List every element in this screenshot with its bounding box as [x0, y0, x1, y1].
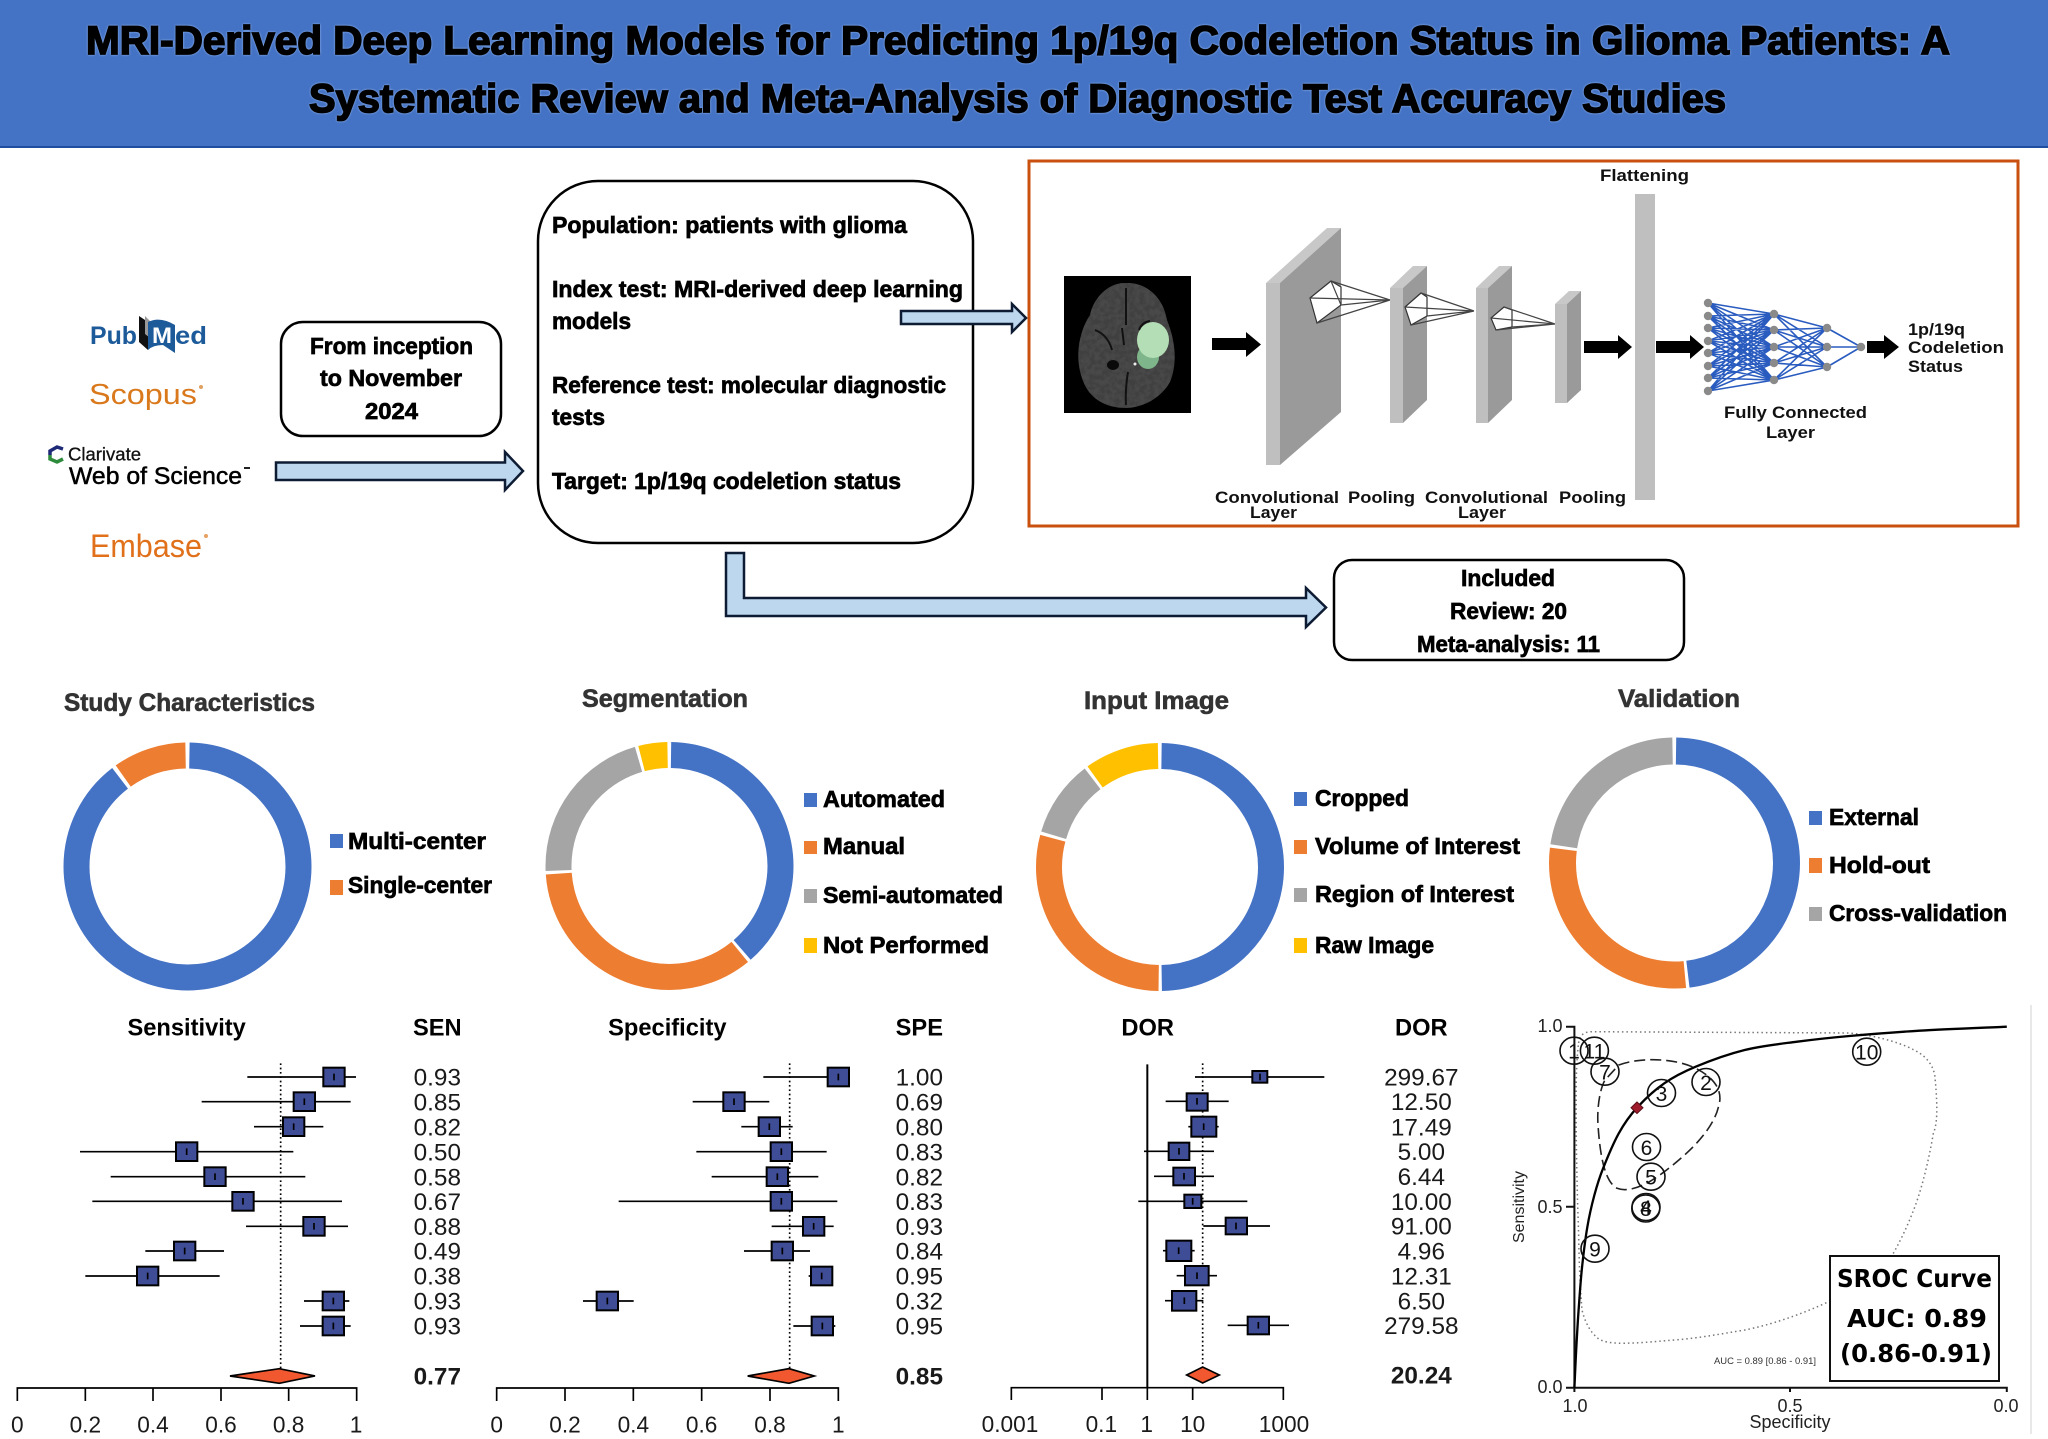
axis: 10: [1180, 1411, 1205, 1437]
axis: 0.6: [686, 1412, 717, 1438]
legend: Cropped: [1315, 785, 1409, 811]
confidence region: [1598, 1060, 1720, 1190]
panel: segmentation donut: [558, 685, 1003, 977]
output label: Codeletion: [1908, 338, 2004, 357]
forest plot: DOR: [982, 1015, 1459, 1437]
pooled diamond: [230, 1369, 315, 1383]
PICO criteria box: models: [552, 308, 631, 334]
study values: 12.50: [1391, 1089, 1452, 1116]
legend: Cross-validation: [1829, 900, 2007, 926]
output label: 1p/19q: [1908, 320, 1965, 339]
title banner: [0, 0, 2048, 148]
legend: Raw Image: [1315, 932, 1434, 958]
heading: Study Characteristics: [64, 689, 315, 717]
SROC callout box: [1830, 1256, 1999, 1381]
study markers: 2: [1700, 1072, 1712, 1095]
study boxes: [597, 1068, 849, 1335]
axis labels: 0.5: [1537, 1197, 1563, 1217]
axis: [982, 1388, 1309, 1437]
PICO criteria box: Population: patients with glioma: [552, 212, 907, 238]
forest plot: sensitivity: [11, 1015, 462, 1438]
layer labels: [1215, 488, 1626, 522]
flattening bar: [1635, 194, 1655, 500]
legend: [330, 828, 492, 898]
database logos: [50, 316, 250, 564]
legend: Volume of Interest: [1315, 833, 1520, 859]
output label: [1908, 320, 2004, 376]
flattening label: Flattening: [1600, 166, 1689, 185]
panel: study characteristics donut: [64, 689, 492, 978]
study values: 0.32: [896, 1289, 943, 1316]
layer labels: Convolutional: [1215, 488, 1339, 507]
axis labels: 1.0: [1537, 1016, 1563, 1036]
study markers: 3: [1656, 1083, 1667, 1106]
arrow: PICO to CNN: [901, 304, 1026, 332]
heading: Segmentation: [582, 685, 748, 713]
axis: 1000: [1259, 1411, 1309, 1437]
date range box: to November: [320, 365, 462, 391]
convolutional layer 2: [1476, 266, 1555, 423]
axis: 1: [350, 1412, 362, 1438]
column heading: DOR: [1395, 1015, 1448, 1041]
axis: 0.4: [137, 1412, 169, 1438]
layer labels: Pooling: [1348, 488, 1415, 507]
included studies box: Included: [1461, 565, 1555, 591]
logo: Scopus: Scopus: [89, 379, 197, 411]
axis: 0.2: [549, 1412, 581, 1438]
heading: Specificity: [608, 1015, 727, 1041]
study values: 0.82: [414, 1114, 461, 1141]
heading: Input Image: [1084, 687, 1229, 715]
confidence intervals: [583, 1077, 838, 1326]
study markers: 6: [1641, 1137, 1652, 1160]
legend: [1294, 785, 1520, 958]
prediction region: [1576, 1032, 1937, 1343]
legend: [1809, 804, 2007, 926]
study values: 299.67: [1384, 1065, 1459, 1092]
study markers: 11: [1583, 1040, 1605, 1064]
study markers: 4: [1640, 1197, 1652, 1220]
axis: 0.2: [70, 1412, 101, 1438]
study boxes: [1166, 1071, 1269, 1334]
axis: 1: [832, 1412, 845, 1438]
PICO criteria box: Index test: MRI-derived deep learning: [552, 276, 963, 302]
fully connected network: [1704, 299, 1865, 395]
included studies box: [1334, 560, 1684, 660]
donut chart: [558, 755, 780, 977]
summary point: [1631, 1102, 1643, 1114]
study values: 0.80: [896, 1114, 943, 1141]
study values: 0.95: [896, 1264, 943, 1291]
arrow: PICO to included: [726, 553, 1326, 627]
heading: Validation: [1618, 685, 1740, 713]
axis: 0.6: [205, 1412, 237, 1438]
axis: 0.8: [273, 1412, 304, 1438]
study values: 0.93: [414, 1289, 461, 1316]
study values: 0.93: [896, 1214, 943, 1241]
study values: 0.88: [414, 1214, 461, 1241]
confidence intervals: [1138, 1077, 1324, 1325]
study values: 6.50: [1398, 1288, 1445, 1315]
study values: 0.83: [896, 1189, 943, 1216]
PICO criteria box: Target: 1p/19q codeletion status: [552, 468, 901, 494]
study values: 12.31: [1391, 1263, 1452, 1290]
study values: 0.83: [896, 1139, 943, 1166]
pooled diamond: [1187, 1367, 1219, 1383]
study markers: 8: [1640, 1198, 1652, 1221]
study values: 0.58: [414, 1164, 461, 1191]
axis labels: 1.0: [1562, 1396, 1588, 1416]
axis: 0: [490, 1412, 503, 1438]
logo: Clarivate Web of Science: Clarivate: [68, 444, 141, 464]
arrow: image to convolution: [1212, 332, 1261, 357]
study markers: 7: [1599, 1062, 1611, 1084]
legend: [804, 786, 1003, 958]
SROC callout box: AUC: 0.89: [1847, 1304, 1987, 1333]
column heading: SEN: [413, 1015, 462, 1041]
panel: validation donut: [1562, 685, 2007, 975]
layer labels: Layer: [1458, 503, 1506, 522]
logo: PubMed: [90, 316, 207, 353]
pooled value: 0.85: [896, 1363, 943, 1390]
logo: PubMed: ed: [175, 322, 207, 350]
study markers: 9: [1589, 1238, 1601, 1262]
legend: Manual: [823, 833, 905, 859]
study markers: [1560, 1037, 1881, 1262]
axis: 0.001: [982, 1411, 1038, 1437]
confidence intervals: [80, 1077, 356, 1326]
layer labels: Convolutional: [1425, 488, 1548, 507]
fully connected label: Layer: [1766, 423, 1815, 442]
PICO criteria box: tests: [552, 404, 605, 430]
study values: 0.93: [414, 1314, 461, 1341]
axis labels: 0.0: [1537, 1377, 1563, 1397]
panel: CNN architecture: [1029, 161, 2018, 526]
donut chart: [1562, 751, 1786, 975]
legend: Hold-out: [1829, 852, 1930, 878]
legend: Semi-automated: [823, 882, 1003, 908]
study values: 1.00: [896, 1065, 943, 1092]
axis: 1: [1140, 1411, 1153, 1437]
study markers: 1: [1568, 1040, 1580, 1064]
included studies box: Meta-analysis: 11: [1417, 631, 1600, 657]
legend: Automated: [823, 786, 945, 812]
study boxes: [137, 1068, 345, 1335]
study values: 0.93: [414, 1065, 461, 1092]
fully connected label: Fully Connected: [1724, 403, 1867, 422]
study values: [1384, 1065, 1459, 1340]
date range box: 2024: [365, 398, 418, 424]
study values: 0.38: [414, 1264, 461, 1291]
study values: 0.67: [414, 1189, 461, 1216]
study values: 10.00: [1391, 1189, 1452, 1216]
small AUC note: AUC = 0.89 [0.86 - 0.91]: [1714, 1356, 1816, 1366]
study values: 4.96: [1398, 1238, 1445, 1265]
logo: PubMed: Pub: [90, 322, 137, 350]
legend: Not Performed: [823, 932, 989, 958]
axis labels: 0.0: [1993, 1396, 2019, 1416]
date range box: From inception: [310, 333, 473, 359]
title banner: Systematic Review and Meta-Analysis of Diagnostic Test Accuracy Studies: [309, 77, 1726, 121]
study values: 0.49: [414, 1239, 461, 1266]
study values: 91.00: [1391, 1214, 1452, 1241]
study values: 279.58: [1384, 1313, 1459, 1340]
axes: [1566, 1027, 2007, 1392]
study values: 17.49: [1391, 1114, 1452, 1141]
study values: 6.44: [1398, 1164, 1445, 1191]
heading: Sensitivity: [128, 1015, 247, 1041]
chart: SROC curve: [1511, 1005, 2031, 1434]
pooled value: 0.77: [414, 1363, 461, 1390]
layer labels: Pooling: [1559, 488, 1626, 507]
study values: 0.85: [414, 1089, 461, 1116]
study values: 0.84: [896, 1239, 943, 1266]
axis labels: Sensitivity: [1511, 1171, 1528, 1243]
axis labels: Specificity: [1749, 1412, 1831, 1432]
study values: 5.00: [1398, 1139, 1445, 1166]
study values: 0.50: [414, 1139, 461, 1166]
arrow: databases to PICO: [276, 452, 523, 490]
convolutional layer 1: [1266, 228, 1390, 465]
SROC callout box: (0.86-0.91): [1840, 1339, 1992, 1368]
study markers: 10: [1855, 1042, 1878, 1064]
legend: Multi-center: [348, 828, 486, 854]
PICO criteria box: Reference test: molecular diagnostic: [552, 372, 946, 398]
axis: 0: [11, 1412, 24, 1438]
study values: 0.82: [896, 1164, 943, 1191]
axis: 0.1: [1086, 1411, 1117, 1437]
axis: [490, 1388, 845, 1438]
study values: 0.95: [896, 1314, 943, 1341]
axis: 0.8: [754, 1412, 786, 1438]
panel: input image donut: [1049, 687, 1520, 978]
logo: Embase: Embase: [90, 528, 202, 564]
title banner: MRI-Derived Deep Learning Models for Predicting 1p/19q Codeletion Status in Glioma Patients: A: [86, 19, 1950, 63]
included studies box: Review: 20: [1450, 598, 1567, 624]
logo: Clarivate Web of Science: Web of Science: [69, 463, 242, 490]
PICO criteria box: [538, 181, 973, 543]
axis: 0.4: [618, 1412, 649, 1438]
output label: Status: [1908, 357, 1963, 376]
legend: Single-center: [348, 872, 492, 898]
SROC callout box: SROC Curve: [1837, 1264, 1992, 1293]
legend: External: [1829, 804, 1919, 830]
axis labels: 0.5: [1777, 1396, 1803, 1416]
heading: DOR: [1121, 1015, 1174, 1041]
arrow: pooling to flatten: [1584, 335, 1632, 359]
logo: Clarivate Web of Science: [50, 444, 250, 490]
date range box: [281, 322, 501, 436]
forest plot: specificity: [490, 1015, 943, 1438]
study values: [414, 1065, 461, 1341]
legend: Region of Interest: [1315, 881, 1514, 907]
layer labels: Layer: [1250, 503, 1297, 522]
study markers: 5: [1645, 1166, 1657, 1190]
SROC curve line: [1574, 1027, 2007, 1388]
study values: 0.69: [896, 1089, 943, 1116]
pooling layer 1: [1390, 266, 1474, 423]
fully connected label: [1724, 403, 1867, 442]
arrow: network to output: [1867, 335, 1899, 359]
axis: [11, 1388, 362, 1438]
study values: [896, 1065, 943, 1341]
arrow: flatten to fully connected: [1656, 335, 1704, 359]
donut chart: [1049, 756, 1271, 978]
pooled value: 20.24: [1391, 1362, 1452, 1389]
pooling layer 2: [1555, 291, 1581, 403]
axis labels: [1511, 1016, 2019, 1432]
logo: PubMed: M: [152, 323, 172, 348]
column heading: SPE: [896, 1015, 943, 1041]
pooled diamond: [748, 1369, 814, 1383]
MRI brain image: [1064, 276, 1191, 413]
donut chart: [76, 756, 298, 978]
